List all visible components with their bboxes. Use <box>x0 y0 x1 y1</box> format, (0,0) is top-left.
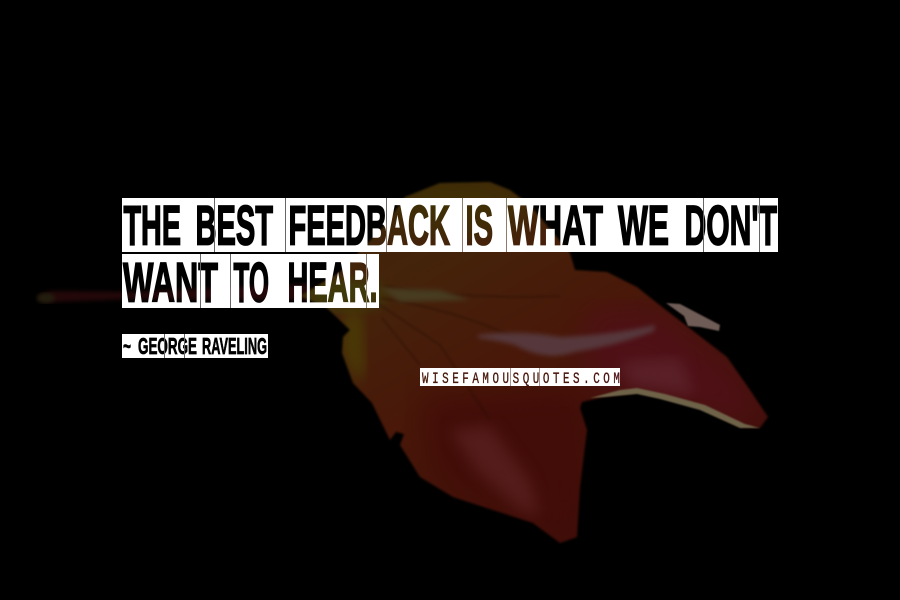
quote line one: WHAT <box>508 194 603 256</box>
olive band behind second line <box>303 279 387 311</box>
pale highlight lower <box>456 426 536 512</box>
leaf illustration <box>37 170 780 550</box>
olive top <box>420 191 510 223</box>
pale highlight right <box>624 359 690 394</box>
quote line one: THE <box>124 194 181 256</box>
quote line two <box>122 250 379 314</box>
quote line one: BEST <box>196 194 273 256</box>
quote line two: WANT <box>123 250 218 314</box>
cream curled edge lower <box>590 388 760 428</box>
quote line two: TO <box>234 250 269 314</box>
knockout quote and label tiles <box>122 194 778 389</box>
quote line one: DON'T <box>684 194 777 256</box>
stem tip <box>37 293 55 303</box>
leaf stem <box>37 284 310 302</box>
yellow left edge <box>342 312 365 384</box>
leaf blade <box>290 170 780 550</box>
lower red lobe <box>438 406 554 466</box>
author label: GEORGE <box>138 333 197 359</box>
quote line one <box>122 194 778 256</box>
cream curled tab upper <box>666 303 720 331</box>
quote line one: FEEDBACK <box>288 194 450 256</box>
website label: WISEFAMOUSQUOTES.COM <box>422 371 620 389</box>
author label: ~ <box>123 333 131 359</box>
pale highlight along main vein <box>478 325 655 356</box>
right red lobe <box>590 318 749 418</box>
quote line two: HEAR. <box>288 250 378 314</box>
quote line one: WE <box>618 194 669 256</box>
author label <box>122 333 268 359</box>
veins <box>382 295 556 380</box>
author label: RAVELING <box>202 333 267 359</box>
pale highlight upper left <box>380 288 470 302</box>
infographic canvas <box>36 181 778 544</box>
quote line one: IS <box>466 194 493 256</box>
